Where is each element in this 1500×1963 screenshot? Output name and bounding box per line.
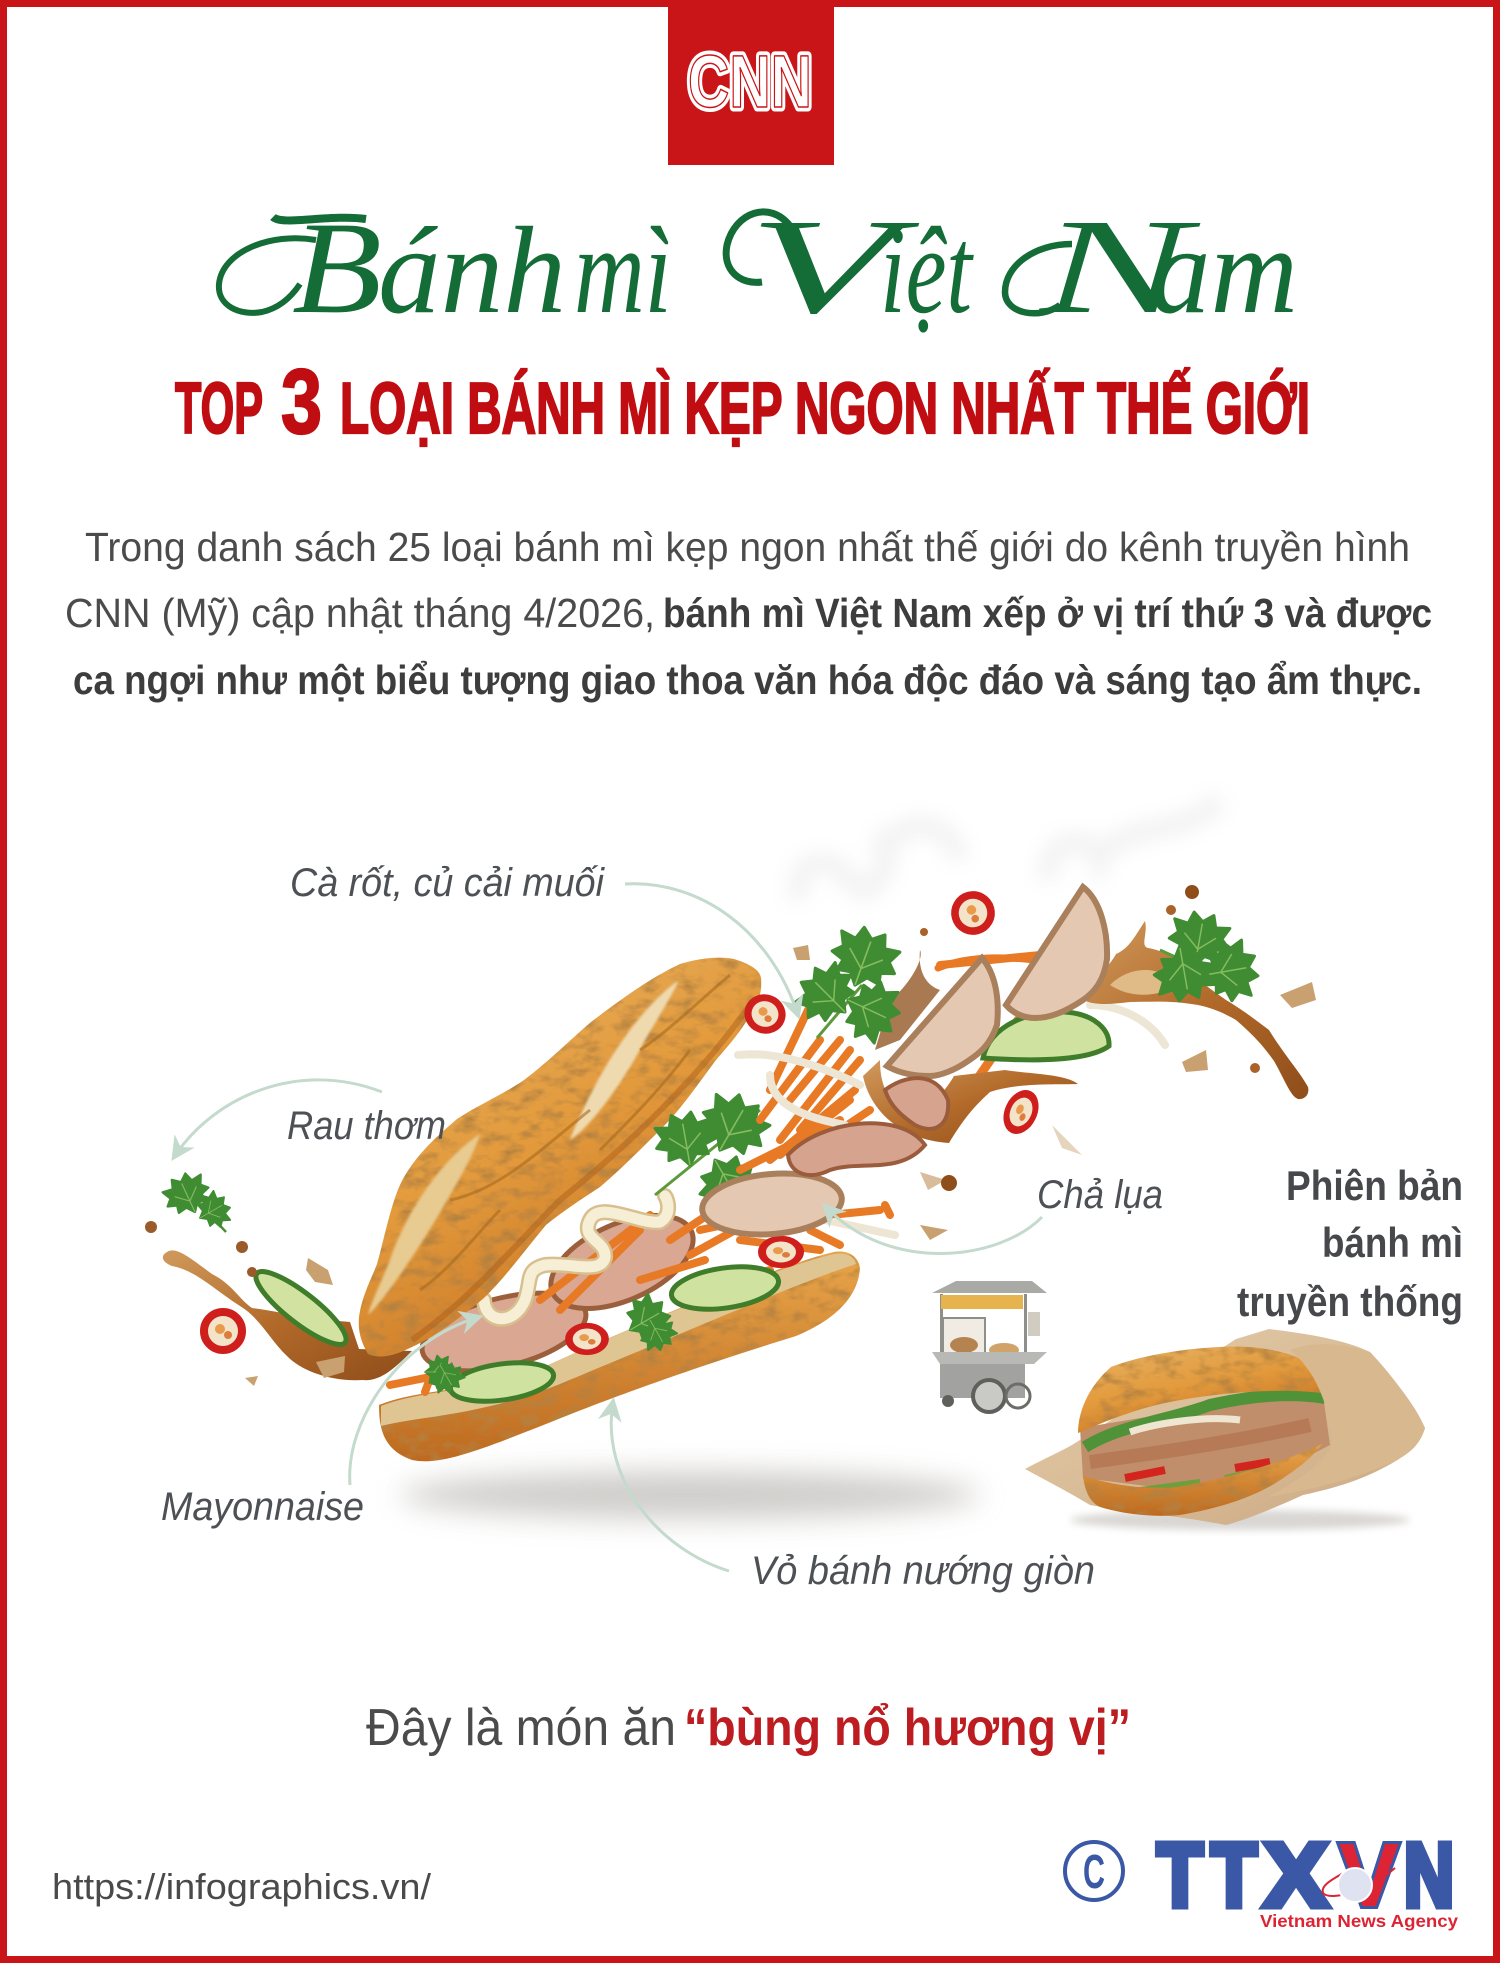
sauce splash right (1083, 921, 1308, 1099)
carrot and pickle filling (390, 1180, 820, 1392)
closing statement: “bùng nổ hương vị” (684, 1699, 1131, 1757)
copyright icon: C (1083, 1846, 1105, 1899)
subtitle heading: 3 (281, 351, 322, 453)
shadow (1070, 1510, 1410, 1530)
flying fillings upper right (700, 885, 1316, 1245)
cilantro flying (787, 909, 1261, 1049)
left sauce splash (163, 1250, 412, 1380)
chili rings flying (948, 888, 1041, 1135)
ingredient labels: Rau thơm (287, 1104, 446, 1148)
traditional version label: truyền thống (1237, 1278, 1463, 1325)
ingredient labels (161, 861, 1163, 1593)
cilantro on sandwich (425, 1084, 777, 1398)
small traditional banh mi illustration (1025, 1329, 1425, 1530)
title: B (292, 194, 382, 341)
cha lua slices (700, 887, 1107, 1240)
CNN logo badge (668, 0, 834, 165)
pork slices (414, 1196, 707, 1385)
CNN logo badge: CNN (688, 40, 812, 123)
cucumber right (983, 1012, 1109, 1060)
TTXVN logo: V (1339, 1826, 1399, 1926)
left flying toppings (145, 1167, 354, 1386)
top bun (359, 958, 761, 1356)
bottom bun (379, 1252, 860, 1461)
title: V (748, 192, 921, 342)
pork slices flying (788, 1078, 948, 1175)
paper wrap front (1268, 1344, 1425, 1497)
subtitle heading: TOP (175, 369, 263, 449)
ingredient labels: Vỏ bánh nướng giòn (751, 1549, 1095, 1593)
subtitle heading (175, 351, 1310, 453)
steam smoke (798, 800, 1220, 900)
pointer arrows (174, 884, 1042, 1571)
chili rings on sandwich (569, 993, 800, 1352)
TTXVN logo: N (1404, 1826, 1454, 1926)
title: mì (574, 202, 672, 339)
CNN logo badge: CNN (688, 40, 812, 123)
ingredient labels: Mayonnaise (161, 1485, 364, 1529)
traditional version label (1237, 1162, 1463, 1325)
TTXVN logo: T (1157, 1826, 1203, 1926)
TTXVN logo: T (1211, 1826, 1257, 1926)
title: N (1038, 192, 1202, 342)
copyright icon (1065, 1842, 1123, 1900)
TTXVN logo: X (1264, 1826, 1328, 1926)
sauce splash centre (863, 1060, 1078, 1143)
mayonnaise squiggle (484, 1196, 668, 1319)
filling (1080, 1388, 1330, 1490)
intro text block: Trong danh sách 25 loại bánh mì kẹp ngon nhất thế giới do kênh truyền hình (85, 524, 1410, 570)
traditional version label: Phiên bản (1286, 1162, 1463, 1209)
bottom bun (1083, 1444, 1322, 1516)
TTXVN logo: Vietnam News Agency (1260, 1911, 1458, 1931)
title: am (1150, 202, 1298, 339)
top bun (1078, 1347, 1323, 1433)
title (219, 192, 1298, 342)
carrots and radish strands (740, 955, 1072, 1245)
food cart illustration (932, 1281, 1047, 1412)
crumbs and droplets (793, 885, 1316, 1240)
ingredient labels: Cà rốt, củ cải muối (290, 861, 605, 905)
title: iệt (880, 202, 974, 339)
cucumber slices (448, 1261, 781, 1407)
intro text block (65, 524, 1432, 703)
title: ánh (378, 202, 566, 339)
paper wrap behind (1025, 1329, 1425, 1525)
intro text block: bánh mì Việt Nam xếp ở vị trí thứ 3 và được (663, 590, 1432, 636)
source url: https://infographics.vn/ (52, 1866, 431, 1907)
ground shadow of main sandwich (400, 1471, 980, 1519)
closing statement (366, 1699, 1131, 1757)
traditional version label: bánh mì (1322, 1219, 1463, 1266)
main exploding sandwich (145, 958, 860, 1461)
ingredient labels: Chả lụa (1037, 1173, 1163, 1217)
TTXVN logo (1157, 1826, 1458, 1931)
intro text block: CNN (Mỹ) cập nhật tháng 4/2026, (65, 590, 655, 636)
closing statement: Đây là món ăn (366, 1699, 676, 1757)
